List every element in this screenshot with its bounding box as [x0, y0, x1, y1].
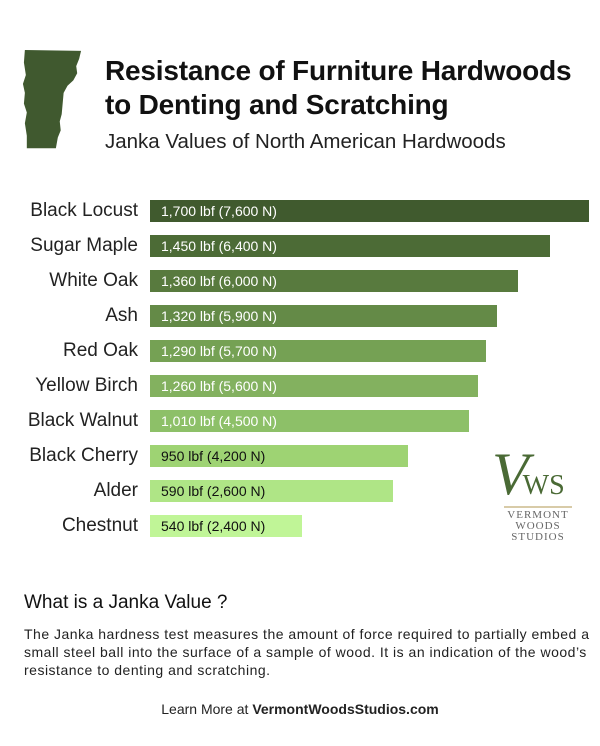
bar chart: Ash — [105, 305, 138, 326]
row: Black Locust — [30, 200, 589, 222]
bar chart: White Oak — [49, 270, 138, 291]
title: to Denting and Scratching — [105, 89, 448, 120]
bar chart: 1,450 lbf (6,400 N) — [161, 238, 277, 254]
row: Ash — [105, 305, 497, 327]
logo: Vermont Woods Studios: STUDIOS — [511, 531, 565, 543]
logo: Vermont Woods Studios: WOODS — [515, 520, 561, 532]
text block: explanation: small steel ball into the surface of a sample of wood. It is an indication of the wood’s — [24, 644, 587, 660]
row: Black Walnut — [28, 410, 469, 432]
text block: explanation: The Janka hardness test measures the amount of force required to partially embed a — [24, 626, 590, 642]
row: Sugar Maple — [30, 235, 550, 257]
bar chart: Alder — [94, 480, 138, 501]
logo: Vermont Woods Studios — [492, 441, 572, 543]
bar chart: Black Walnut — [28, 410, 138, 431]
row: Alder — [94, 480, 393, 502]
row: Yellow Birch — [35, 375, 478, 397]
title — [105, 55, 571, 120]
bar chart — [28, 200, 589, 537]
bar chart: 950 lbf (4,200 N) — [161, 448, 265, 464]
bar chart: Black Locust — [30, 200, 138, 221]
text block: explanation: resistance to denting and scratching. — [24, 662, 271, 678]
bar chart: 1,700 lbf (7,600 N) — [161, 203, 277, 219]
bar chart: Sugar Maple — [30, 235, 138, 256]
title: Resistance of Furniture Hardwoods — [105, 55, 571, 86]
text block: explanation — [24, 626, 590, 678]
bar chart: 1,260 lbf (5,600 N) — [161, 378, 277, 394]
logo: Vermont Woods Studios: VWS — [492, 441, 565, 507]
icon: vermont map — [23, 50, 81, 148]
bar chart: 540 lbf (2,400 N) — [161, 518, 265, 534]
logo: Vermont Woods Studios: VERMONT — [507, 509, 569, 521]
bar chart: 1,290 lbf (5,700 N) — [161, 343, 277, 359]
bar chart: 1,360 lbf (6,000 N) — [161, 273, 277, 289]
row: White Oak — [49, 270, 518, 292]
heading: what is a Janka value: What is a Janka Value ? — [24, 592, 227, 613]
row: Black Cherry — [29, 445, 408, 467]
row: Chestnut — [62, 515, 302, 537]
bar chart: Red Oak — [63, 340, 138, 361]
bar chart: 1,010 lbf (4,500 N) — [161, 413, 277, 429]
bar chart: Yellow Birch — [35, 375, 138, 396]
footer: Learn More at VermontWoodsStudios.com — [161, 701, 439, 717]
bar chart: 1,320 lbf (5,900 N) — [161, 308, 277, 324]
bar chart: Black Cherry — [29, 445, 138, 466]
bar chart: 590 lbf (2,600 N) — [161, 483, 265, 499]
bar chart: Chestnut — [62, 515, 138, 536]
subtitle: Janka Values of North American Hardwoods — [105, 130, 506, 153]
row: Red Oak — [63, 340, 486, 362]
